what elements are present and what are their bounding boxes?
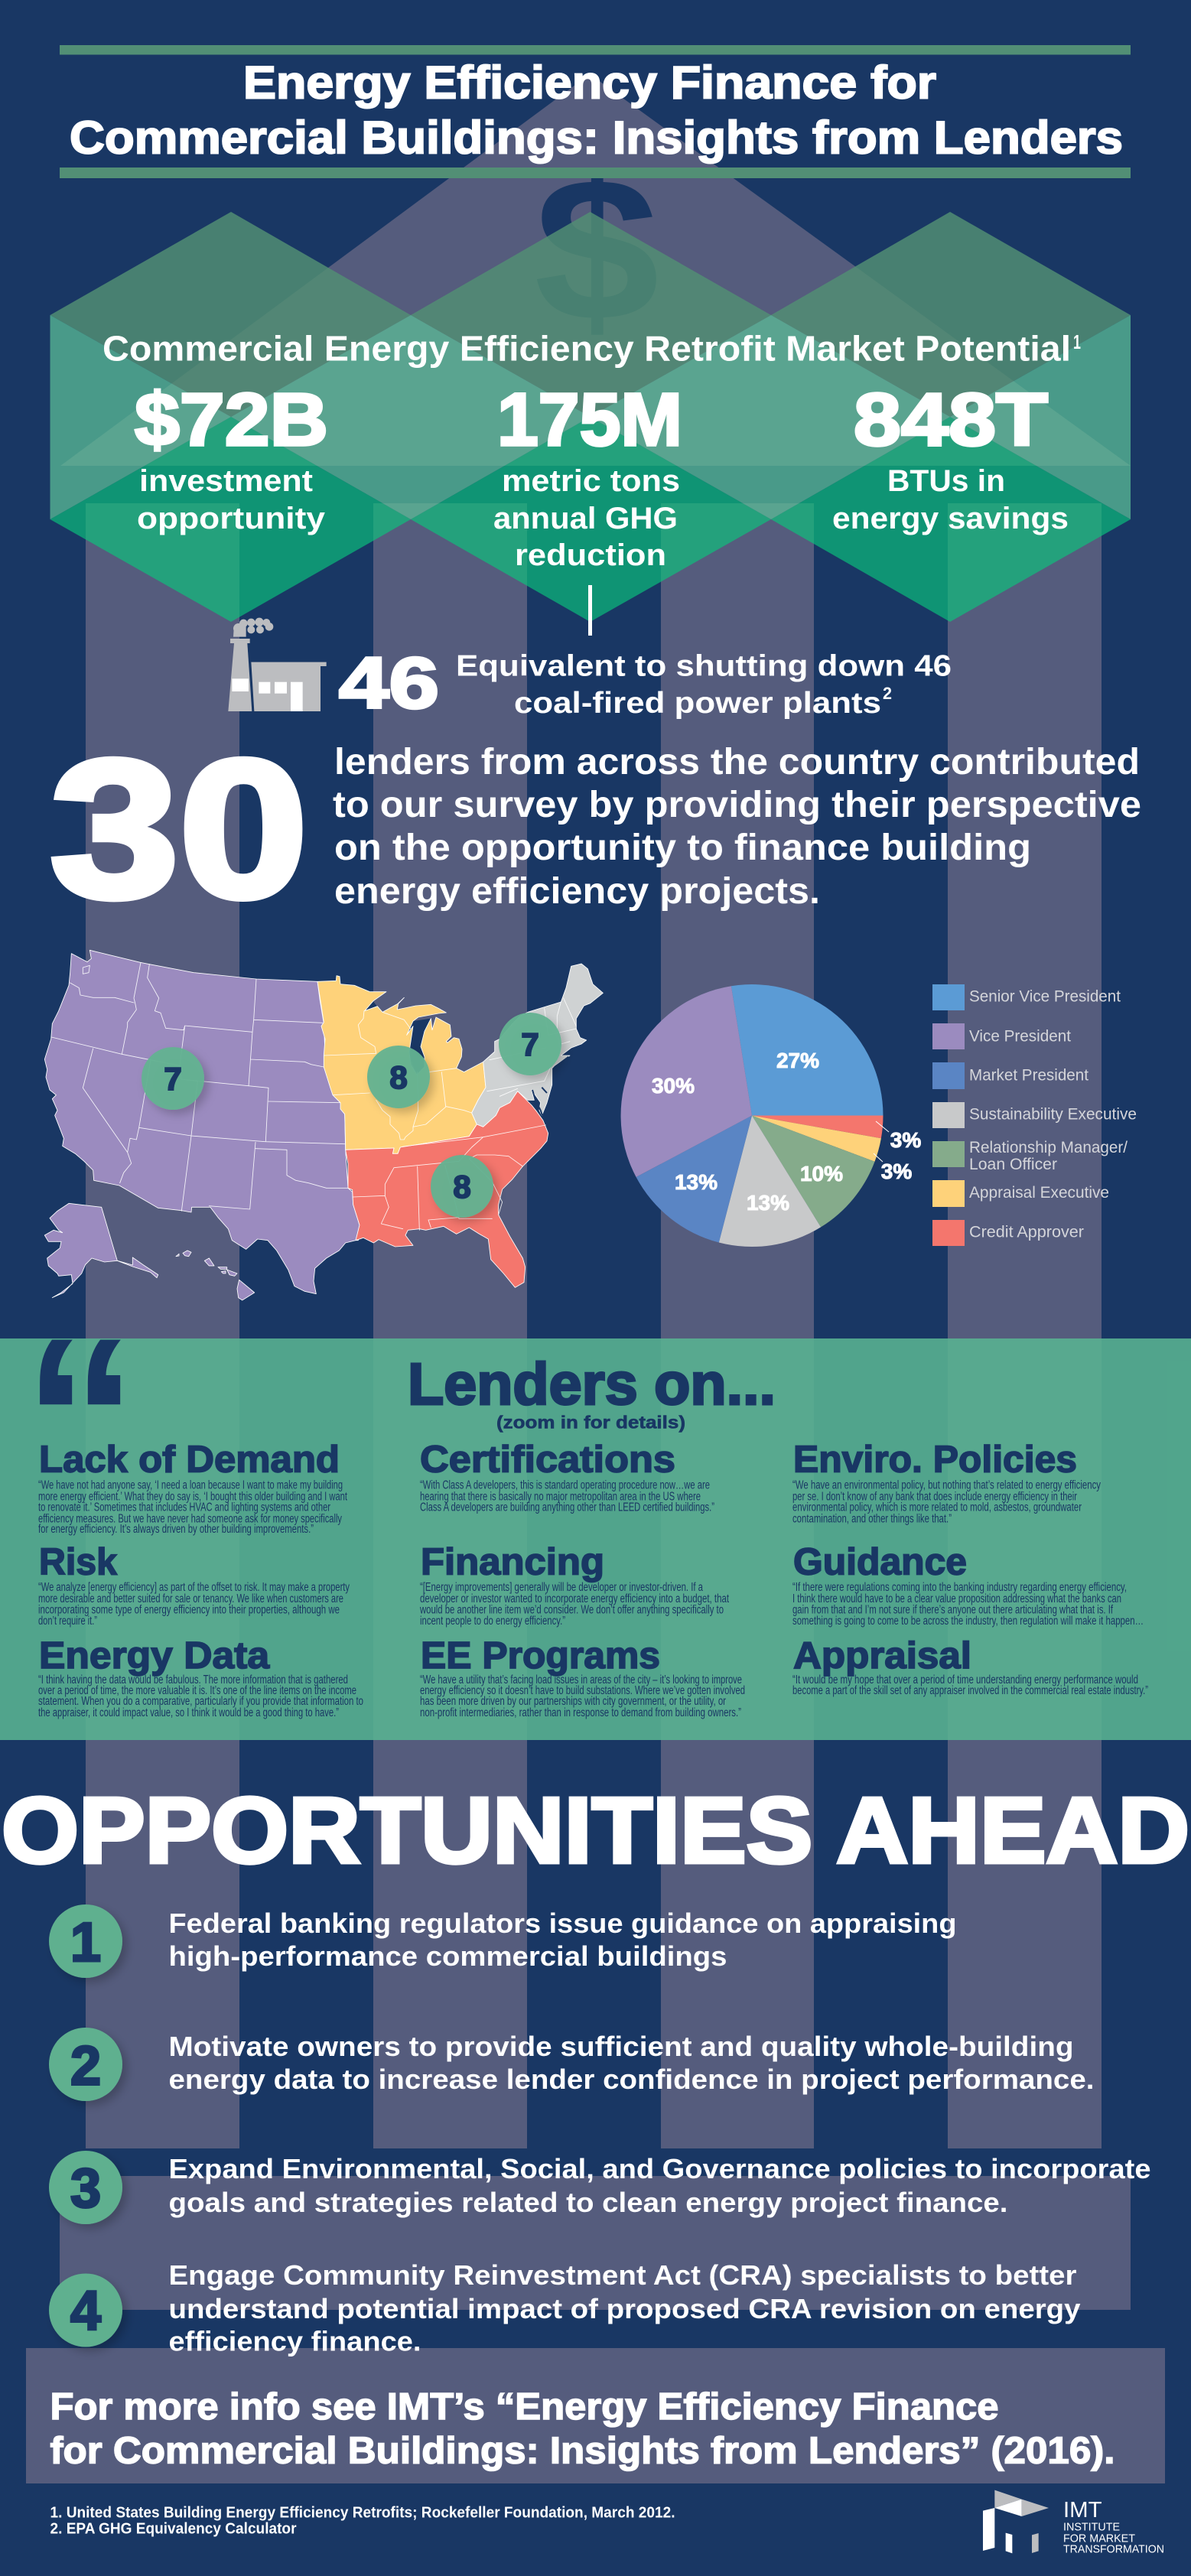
icon: quotation mark: “ [23,1290,138,1547]
marker: southeast region count: 8 [453,1169,471,1205]
stat: energy savings [832,378,1069,535]
legend: respondent roles: Credit Approver [969,1222,1084,1241]
stat: GHG reduction: annual GHG [493,502,678,535]
quote: environmental policies: Enviro. Policies [793,1439,1077,1481]
region: Northeast states [472,964,603,1127]
stat: GHG reduction: reduction [515,538,666,572]
logo: IMT: INSTITUTE [1063,2521,1120,2534]
quote: EE programs [420,1635,745,1719]
opportunity 4 [49,2259,1080,2357]
quote: certifications: Class A developers are building anything other than LEED certified buildings.” [420,1501,714,1514]
stat: 46 power plants [339,642,952,724]
opportunity 3: 3 [70,2158,101,2220]
footnotes [50,2504,675,2538]
quote: risk: don’t require it.” [38,1615,97,1628]
quote: risk: more desirable and better suited for sale or tenancy. We like when customers are [38,1592,343,1605]
logo: IMT [983,2490,1164,2555]
icon: dollar sign on the roof: $ [534,136,659,363]
quote: energy data [38,1635,363,1719]
quote: EE programs: energy efficiency so it doesn’t have to build substations. Where we’ve gotten involved [420,1684,745,1697]
stat: energy savings: BTUs in [887,464,1005,498]
quote: financing [419,1542,730,1628]
quote: EE programs: has been more driven by our partnerships with city government, or the utility, or [420,1695,726,1708]
pie chart: respondent roles: 10% [800,1162,843,1186]
pie chart: respondent roles: 3% [881,1160,912,1183]
stat: investment: $72B [135,378,328,461]
stat: energy savings: 848T [854,378,1048,461]
legend: respondent roles: Sustainability Executive [969,1104,1137,1123]
opportunity 2: 2 [70,2036,101,2097]
opportunity 2 [49,2028,1094,2101]
legend: respondent roles: Senior Vice President [969,987,1121,1005]
stat: GHG reduction: 175M [497,378,682,461]
callout: more info [26,2348,1165,2483]
stat: GHG reduction: metric tons [502,464,680,498]
quote: EE programs: non-profit intermediaries, rather than in response to demand from building owners.” [420,1706,741,1719]
pie chart: respondent roles [621,984,921,1247]
legend: respondent roles: Relationship Manager/ [969,1138,1128,1156]
US map by region [44,950,603,1300]
heading: lenders on: (zoom in for details) [496,1412,685,1432]
opportunity 3 [49,2151,1150,2224]
opportunity 1 [49,1904,956,1978]
stat: 30 lenders: 30 [50,720,308,938]
quote: risk: Risk [39,1542,118,1583]
quote: certifications: hearing that there is basically no major metropolitan area in the US where [420,1490,701,1503]
marker: northeast region count [499,1013,561,1075]
icon: coal power plant [228,618,327,711]
title block: Commercial Buildings: Insights from Lenders [70,112,1123,164]
region: Midwest states [317,976,486,1153]
marker: midwest region count: 8 [389,1059,408,1095]
quote: EE programs: “We have a utility that’s facing load issues in areas of the city – it’s looking to improve [420,1673,742,1686]
quote: risk: “We analyze [energy efficiency] as part of the offset to risk. It may make a property [38,1581,350,1594]
quote: lack of demand [38,1439,347,1536]
quote: energy data: statement. When you do a comparative, particularly if you provide that information to [38,1695,363,1708]
quote: lack of demand: Lack of Demand [39,1439,340,1481]
quote: lack of demand: for energy efficiency. It’s always driven by other building improvements.” [38,1523,314,1536]
stat: 46 power plants: 2 [883,684,892,703]
opportunity 1: Federal banking regulators issue guidance on appraising [168,1908,956,1939]
quote: risk [38,1542,350,1628]
opportunity 4: Engage Community Reinvestment Act (CRA) specialists to better [168,2259,1077,2291]
quote: certifications: Certifications [420,1439,675,1481]
region: Southeast states [346,1091,548,1287]
quote: energy data: Energy Data [39,1635,270,1677]
quote: environmental policies: per se. I don’t know of any bank that does include energy efficiency in their [792,1490,1077,1503]
opportunity 4: efficiency finance. [168,2325,421,2357]
quote: financing: “[Energy improvements] generally will be developer or investor-driven. If a [420,1581,703,1594]
quote: lack of demand: more energy efficient.’ What they do say is, ‘I bought this older building and I want [38,1490,347,1503]
quote: financing: Financing [421,1542,604,1583]
quote: environmental policies [792,1439,1101,1525]
quote: energy data: “I think having the data would be fabulous. The more information that is gathered [38,1673,348,1686]
market potential diamonds [50,212,1131,622]
quote: lack of demand: “We have not had anyone say, ‘I need a loan because I want to make my building [38,1478,343,1491]
quote: guidance [792,1542,1144,1628]
pie chart: respondent roles: 13% [747,1191,789,1215]
logo: IMT: TRANSFORMATION [1063,2542,1164,2555]
legend: respondent roles: Appraisal Executive [969,1183,1109,1202]
stat: 46 power plants: Equivalent to shutting down 46 [456,650,952,682]
quote: lack of demand: efficiency measures. But we have never had someone ask for money specifically [38,1512,342,1525]
quote: certifications: “With Class A developers, this is standard operating procedure now…we are [420,1478,710,1491]
quote: appraisal: Appraisal [793,1635,971,1677]
stat: 30 lenders: lenders from across the country contributed [334,742,1140,782]
heading: market potential: Commercial Energy Efficiency Retrofit Market Potential [103,329,1071,369]
opportunity 4: 4 [70,2281,101,2342]
stat: 46 power plants: 46 [339,642,439,724]
callout: more info: For more info see IMT’s “Energy Efficiency Finance [50,2386,999,2428]
quote: financing: incent people to do energy efficiency.” [420,1615,565,1628]
heading: opportunities ahead: OPPORTUNITIES AHEAD [2,1778,1189,1882]
quote: certifications [420,1439,714,1514]
title block [60,45,1131,178]
marker: southeast region count [431,1155,493,1218]
title block: Energy Efficiency Finance for [243,57,936,109]
quote: lack of demand: to renovate it.’ Sometimes that includes HVAC and lighting systems and other [38,1501,330,1514]
stat: investment: investment [139,464,313,498]
panel: lenders on [0,1290,1191,1740]
quote: financing: developer or investor wanted to incorporate energy efficiency into a budget, that [420,1592,730,1605]
panel background [0,1338,1191,1740]
quote: risk: incorporating some type of energy efficiency into their properties, although we [38,1603,340,1617]
stat: investment: opportunity [137,502,326,535]
opportunity 2: energy data to increase lender confidence in project performance. [168,2064,1094,2095]
callout: more info: for Commercial Buildings: Insights from Lenders” (2016). [50,2431,1115,2472]
legend: respondent roles: Market President [969,1066,1088,1085]
stat: 30 lenders: energy efficiency projects. [334,871,820,912]
pie chart: respondent roles: 27% [776,1049,819,1072]
region: Alaska and Hawaii [44,1203,255,1300]
opportunity 3: Expand Environmental, Social, and Governance policies to incorporate [168,2153,1150,2184]
pie chart: respondent roles: 3% [890,1128,921,1152]
pie chart: respondent roles: 13% [675,1170,718,1194]
logo: IMT: IMT [1063,2498,1102,2522]
opportunity 1: 1 [70,1912,101,1973]
opportunity 4: understand potential impact of proposed CRA revision on energy [168,2293,1080,2324]
region: west and central states [44,950,360,1294]
quote: environmental policies: contamination, and other things like that.” [792,1512,952,1525]
bank building illustration: pillars, roof and base [60,74,1131,2310]
footnotes: 2. EPA GHG Equivalency Calculator [50,2521,297,2538]
connector line [588,585,592,636]
footnotes: 1. United States Building Energy Efficiency Retrofits; Rockefeller Foundation, March 2012. [50,2504,675,2521]
legend: respondent roles: Loan Officer [969,1155,1057,1173]
stat: energy savings: energy savings [832,502,1069,535]
opportunity 3: goals and strategies related to clean energy project finance. [168,2187,1008,2218]
pie chart: respondent roles: 30% [652,1074,695,1098]
legend: respondent roles [932,984,1137,1246]
marker: west region count: 7 [164,1061,182,1097]
marker: west region count [142,1047,204,1110]
quote: energy data: the appraiser, it could impact value, so I think it would be a good thing to have.” [38,1706,339,1719]
logo: IMT: FOR MARKET [1063,2532,1135,2545]
opportunity 2: Motivate owners to provide sufficient and quality whole-building [168,2031,1074,2062]
stat: investment [135,378,328,535]
opportunity 1: high-performance commercial buildings [168,1940,727,1972]
stat: 46 power plants: coal-fired power plants [514,687,881,720]
quote: EE programs: EE Programs [421,1635,660,1677]
heading: market potential: 1 [1073,330,1081,353]
legend: respondent roles: Vice President [969,1026,1071,1045]
stat: 30 lenders: to our survey by providing their perspective [333,785,1141,825]
heading: lenders on: Lenders on... [408,1351,776,1417]
marker: midwest region count [367,1046,430,1108]
quote: energy data: over a period of time, the more valuable it is. It’s one of the line items on the income [38,1684,356,1697]
stat: GHG reduction [493,378,682,572]
quote: financing: would be another line item we’d consider. We don’t offer anything specifically to [419,1603,724,1617]
quote: guidance: Guidance [793,1542,967,1583]
stat: 30 lenders: on the opportunity to finance building [334,828,1031,868]
marker: northeast region count: 7 [521,1026,539,1062]
stat: 30 lenders [50,720,1141,938]
quote: appraisal [792,1635,1148,1697]
quote: environmental policies: environmental policy, which is more related to mold, asbestos, groundwater [792,1501,1082,1514]
